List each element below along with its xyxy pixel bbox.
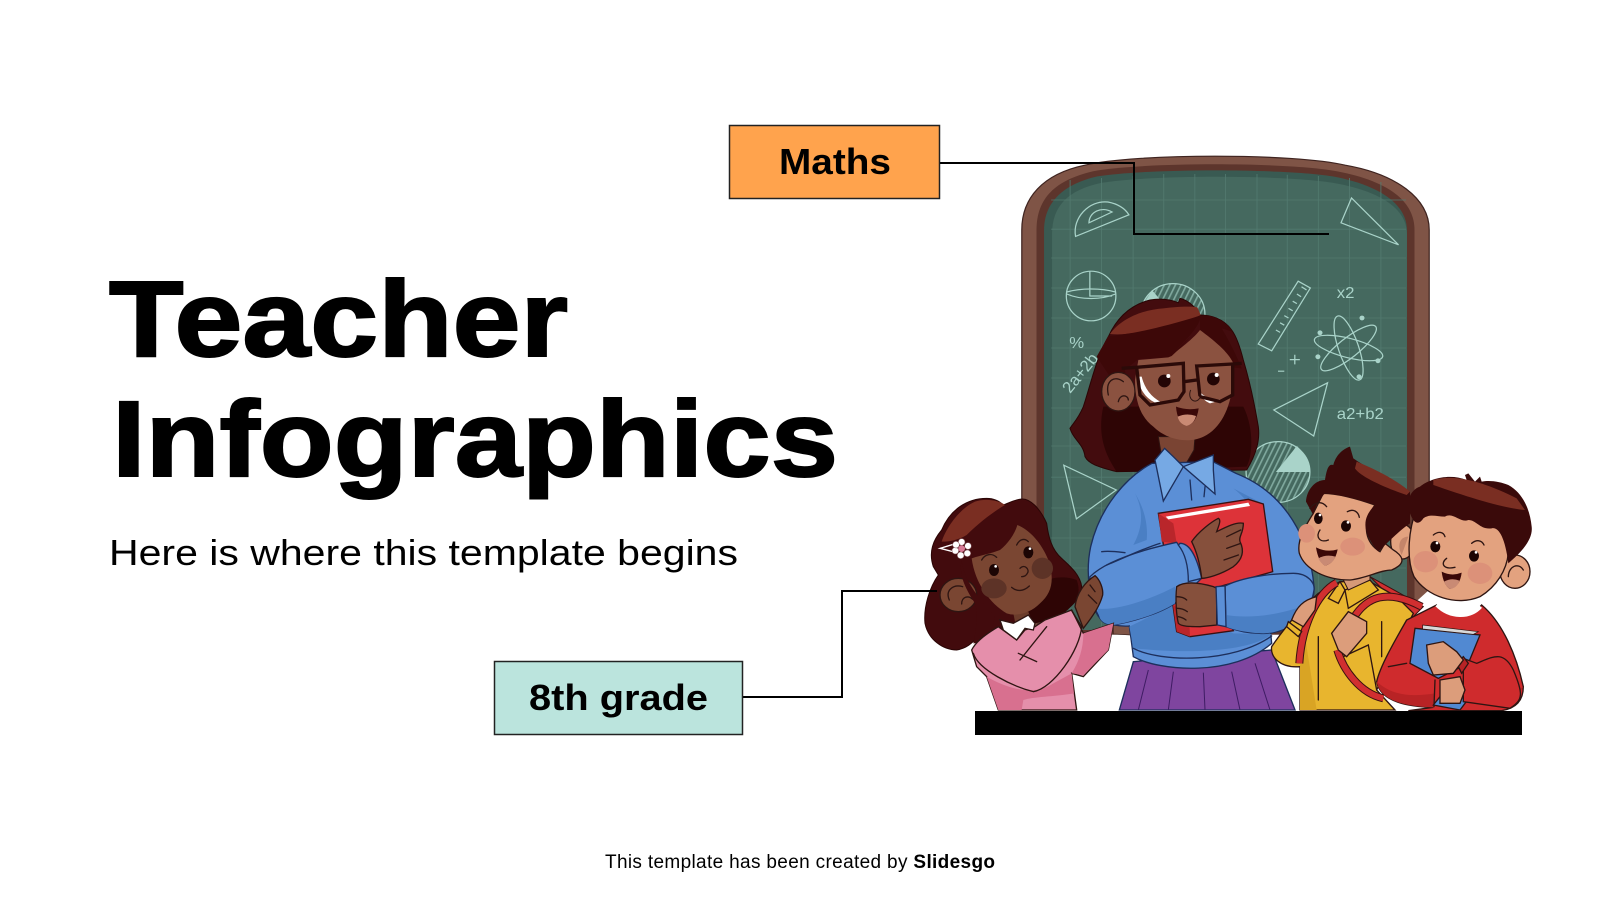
black base bar (975, 711, 1522, 735)
girl hair clip (940, 539, 971, 559)
teacher sweater (1088, 462, 1314, 668)
front boy ear (1500, 555, 1530, 588)
connector: Maths (940, 163, 1329, 234)
boy mouth (1316, 547, 1338, 566)
boy shirt (1271, 582, 1413, 710)
front boy cheeks (1413, 551, 1438, 572)
chalk drawings: 2a+2b (1059, 350, 1102, 396)
girl hand (1075, 576, 1103, 628)
girl eyes (989, 564, 999, 576)
label box: Maths (730, 126, 940, 198)
girl hair highlight (942, 500, 1005, 542)
boy neck (1343, 573, 1370, 590)
teacher upper cuff (1178, 543, 1202, 582)
teacher eyes (1158, 375, 1171, 387)
boy face (1299, 493, 1402, 580)
teacher upper arm (1089, 542, 1202, 625)
teacher collar (1155, 448, 1183, 501)
chalkboard (1022, 156, 1429, 640)
figure: teacher (1070, 298, 1314, 710)
figure: boy with blue book (1377, 473, 1532, 711)
footer credit: This template has been created by Slidesgo (605, 852, 995, 873)
girl face (972, 525, 1052, 615)
teacher nose (1190, 390, 1200, 401)
girl hair (925, 498, 1082, 650)
chalk drawings (1059, 198, 1399, 519)
chalk drawings: a2+b2 (1337, 405, 1384, 423)
backpack back (1370, 577, 1423, 617)
label box: Maths: Maths (779, 141, 891, 182)
subtitle: Here is where this template begins (109, 532, 738, 573)
front boy hands (1427, 642, 1463, 675)
title (109, 258, 838, 499)
label box: 8th grade: 8th grade (529, 677, 708, 718)
teacher face (1135, 330, 1234, 440)
teacher skirt (1119, 650, 1295, 710)
boy collar (1328, 582, 1345, 603)
label box: 8th grade (494, 662, 742, 734)
front boy sweater (1377, 605, 1523, 711)
teacher neck (1158, 437, 1195, 468)
boy ear (1391, 524, 1415, 559)
front boy face (1409, 500, 1508, 601)
teacher head (1070, 298, 1259, 472)
figure: boy with backpack (1271, 447, 1423, 710)
boy centre hand (1332, 612, 1367, 657)
boy eyes (1314, 513, 1323, 524)
teacher lower hand (1176, 583, 1217, 627)
teacher hair dark top (1097, 316, 1200, 393)
girl hair lock (961, 560, 995, 643)
front boy mouth (1442, 572, 1462, 589)
figure: girl (925, 498, 1113, 710)
front boy eyes (1430, 541, 1440, 552)
chalk drawings: % (1069, 334, 1084, 352)
front boy hair (1408, 473, 1532, 563)
blue book (1410, 625, 1480, 710)
girl cheeks (981, 578, 1007, 598)
teacher hair highlight (1110, 307, 1201, 334)
teacher mouth (1176, 407, 1199, 426)
girl neck (1013, 612, 1033, 630)
boy hair (1306, 447, 1410, 552)
title: Teacher (109, 258, 568, 379)
teacher upper hand (1192, 518, 1243, 578)
teacher ear (1102, 372, 1135, 411)
connector: 8th grade (743, 591, 937, 697)
title: Infographics (112, 378, 838, 499)
front boy arm (1463, 657, 1520, 708)
teacher torso (1088, 448, 1314, 710)
girl sweater (972, 610, 1113, 710)
boy cheeks (1298, 524, 1315, 543)
backpack straps (1299, 583, 1422, 698)
red book (1158, 499, 1273, 637)
boy left hand (1292, 597, 1317, 627)
girl ear (940, 578, 977, 612)
atom (1312, 313, 1385, 383)
illustration: teacher and pupils at chalkboard (925, 156, 1532, 711)
chalk drawings: x2 (1337, 284, 1355, 302)
girl collar (1000, 615, 1035, 640)
teacher lower sleeve (1225, 573, 1314, 633)
teacher glasses (1122, 363, 1242, 405)
